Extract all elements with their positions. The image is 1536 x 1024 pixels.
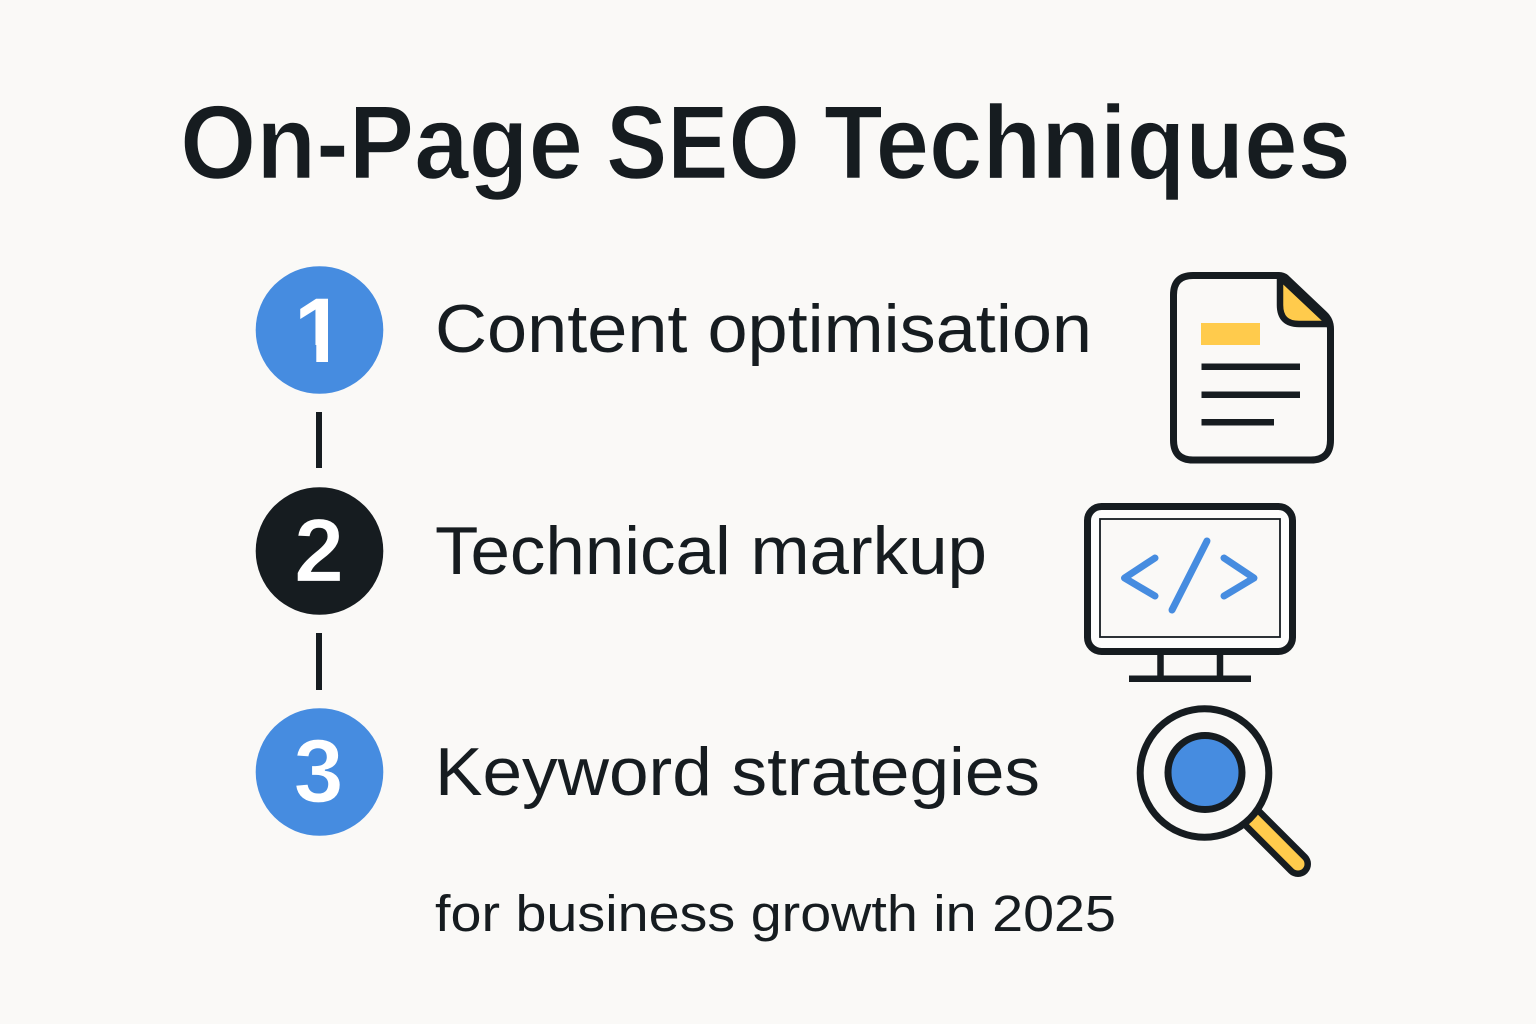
step 2 badge xyxy=(256,487,383,615)
icon: code monitor xyxy=(1088,506,1292,682)
step 1 label: Content optimisation xyxy=(435,291,1092,367)
step 1 badge: 1 xyxy=(294,280,345,382)
title: On-Page xyxy=(180,84,583,202)
step 1 badge xyxy=(256,266,383,394)
step 3 label: Keyword strategies xyxy=(435,734,1040,810)
title xyxy=(180,84,1351,202)
step 3 badge xyxy=(256,708,383,836)
subtitle: for business growth in 2025 xyxy=(435,885,1116,942)
icon: document xyxy=(1174,276,1330,460)
title: SEO xyxy=(606,84,800,202)
connector 1 to 2 xyxy=(316,412,322,468)
icon: magnifying glass xyxy=(1140,709,1298,864)
connector 2 to 3 xyxy=(316,633,322,690)
title: Techniques xyxy=(824,84,1351,202)
step 3 badge: 3 xyxy=(293,722,344,822)
step 2 label: Technical markup xyxy=(435,513,987,589)
step 2 badge: 2 xyxy=(294,502,344,602)
